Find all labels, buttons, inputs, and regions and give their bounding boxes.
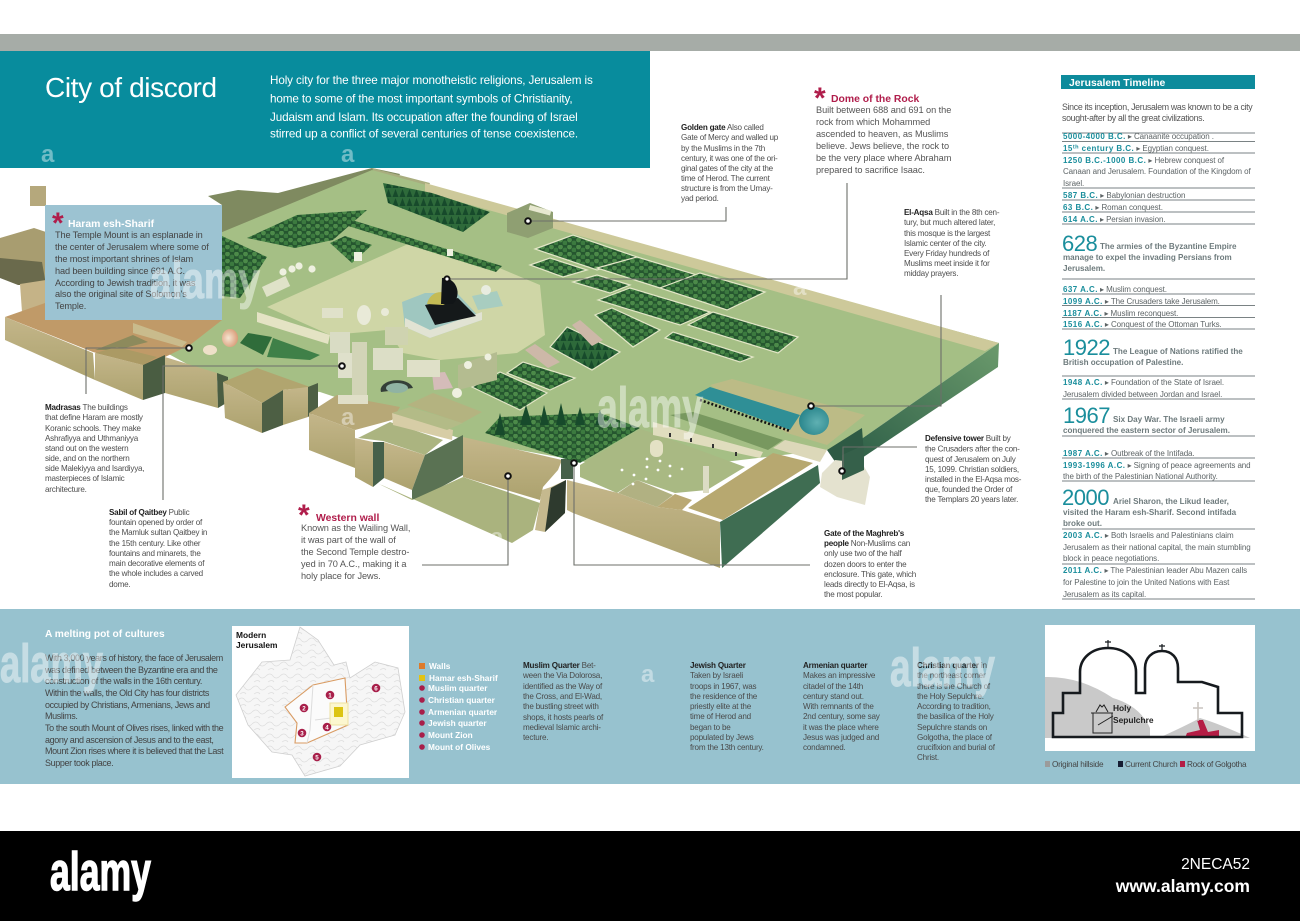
callout: El-Aqsa: Every Friday hundreds of [904, 249, 990, 258]
header panel [0, 51, 650, 168]
callout: Madrasas: side, and on the northern [45, 454, 130, 463]
diagram: Church of the Holy Sepulchre [1045, 625, 1255, 751]
map legend: Hamar esh-Sharif [429, 673, 498, 683]
text: Armenian quarter: century stand out. [803, 692, 864, 701]
map legend: Christian quarter [428, 695, 496, 705]
text: Muslim Quarter: tecture. [523, 733, 548, 742]
top grey band [0, 34, 1300, 51]
map legend: Armenian quarter [428, 707, 498, 717]
diagram: Church of the Holy Sepulchre: Holy [1113, 703, 1131, 713]
map: Modern Jerusalem: 3 [300, 730, 304, 738]
timeline entries: conquests: ▸ Conquest of the Ottoman Turks. [1103, 320, 1222, 329]
text: Muslim Quarter: ween the Via Dolorosa, [522, 671, 602, 680]
watermarks: a [490, 524, 504, 551]
intro text: Judaism and Islam. Its occupation after the founding of Israel [270, 111, 578, 124]
panel: Jerusalem Timeline [1061, 75, 1255, 599]
text: Armenian quarter: it was the place where [803, 723, 879, 732]
timeline entry: 628: Jerusalem. [1063, 264, 1105, 273]
text: Christian quarter: According to tradition, [917, 702, 991, 711]
callout: Dome of the Rock: be the very place where Abraham [816, 153, 952, 163]
callout: Madrasas: architecture. [45, 485, 87, 494]
callout: Sabil of Qaitbey: the 15th century. Like other [109, 539, 201, 548]
callout: Dome of the Rock [814, 82, 954, 175]
western wall plaza [377, 477, 540, 543]
callout: Sabil of Qaitbey: Public [167, 508, 190, 517]
timeline heading [1061, 75, 1255, 89]
callout: Dome of the Rock: believe. Jews believe, the rock to [816, 141, 949, 151]
timeline entry: 1967 [1063, 403, 1230, 435]
back wall row [208, 168, 400, 240]
watermarks: a [941, 395, 955, 422]
text: Jewish Quarter: priestly elite at the [690, 702, 752, 711]
watermarks: alamy [597, 376, 703, 440]
callout: El-Aqsa: Built in the 8th cen- [933, 208, 1000, 217]
text: Christian quarter: Christian quarter [917, 661, 980, 670]
panel: Haram esh-Sharif: the center of Jerusalem where some of [55, 242, 209, 252]
panel: Haram esh-Sharif: also the original site of Solomon's [55, 289, 187, 299]
text: Jewish Quarter: Jewish Quarter [690, 661, 747, 670]
courtyard details [621, 440, 709, 493]
callout: Sabil of Qaitbey: Sabil of Qaitbey [109, 508, 167, 517]
timeline entries: 2003-2011: ▸ Both Israelis and Palestinians claim [1103, 531, 1234, 540]
map legend: Mount of Olives [428, 742, 491, 752]
west surfaces [5, 303, 222, 365]
section text: With 3,000 years of history, the face of Jerusalem [45, 653, 223, 663]
panel: Haram esh-Sharif: The Temple Mount is an esplanade in [55, 230, 203, 240]
timeline entry: 2000 [1062, 485, 1238, 528]
timeline entry: 2000: broke out. [1063, 519, 1102, 528]
panel: Haram esh-Sharif [45, 205, 222, 320]
callout: Dome of the Rock: rock from which Mohammed [816, 117, 930, 127]
map: Modern Jerusalem [232, 626, 409, 778]
timeline entry: 628 [1062, 231, 1239, 273]
callout: Sabil of Qaitbey: the Mamluk sultan Qaitbey in [109, 528, 207, 537]
callout: Golden gate: Gate of Mercy and walled up [681, 133, 779, 142]
text: Armenian quarter: With remnants of the [803, 702, 874, 711]
timeline heading: Jerusalem Timeline [1069, 78, 1165, 89]
timeline entry: 1922: 1922 [1063, 335, 1110, 360]
esplanade [267, 240, 545, 360]
text: Christian quarter: the basilica of the Holy [917, 712, 995, 721]
section text: To the south Mount of Olives rises, linked with the [45, 723, 224, 733]
panel: Haram esh-Sharif: According to Jewish tradition, it was [55, 278, 196, 288]
timeline entries: 1987-1996: ▸ Signing of peace agreements and [1125, 461, 1251, 470]
small domes and buildings [203, 305, 389, 355]
callout: Defensive tower: the Templars 20 years later. [925, 495, 1018, 504]
diagram: Church of the Holy Sepulchre: Sepulchre [1113, 715, 1154, 725]
panel: Haram esh-Sharif: Temple. [55, 301, 86, 311]
timeline entries: antiquity: 1250 B.C.-1000 B.C. [1063, 156, 1146, 165]
timeline entries: 1987-1996: ▸ Outbreak of the Intifada. [1103, 449, 1195, 458]
panel: Haram esh-Sharif: had been building since 691 A.C. [55, 266, 185, 276]
callout: Golden gate: by the Muslims in the 7th [681, 144, 765, 153]
timeline entries: conquests: ▸ Muslim reconquest. [1102, 309, 1178, 318]
timeline entries: antiquity: ▸ Hebrew conquest of [1146, 156, 1225, 165]
section text: Within the walls, the Old City has four districts [45, 688, 210, 698]
terraced gardens [472, 235, 798, 410]
timeline entry: 1948: 1948 A.C. [1063, 378, 1103, 387]
text: Armenian quarter: Armenian quarter [803, 661, 868, 670]
diagram legend: Current Church [1125, 760, 1178, 769]
callout: Defensive tower: quest of Jerusalem on July [925, 455, 1017, 464]
text: Muslim Quarter: Bet- [580, 661, 596, 670]
panel: Haram esh-Sharif: the most important shrines of Islam [55, 254, 194, 264]
callout: Golden gate: Golden gate [681, 123, 726, 132]
timeline entries: 1987-1996: the birth of the Palestinian National Authority. [1063, 472, 1218, 481]
footer image id and site: 2NECA52 [1181, 856, 1250, 873]
callout: Madrasas: that define Haram are mostly [45, 413, 144, 422]
intro text: home to some of the most important symbols of Christianity, [270, 92, 573, 106]
timeline entries: antiquity: 5000-4000 B.C. [1063, 132, 1126, 141]
upper gardens [222, 183, 502, 298]
watermarks: a [341, 404, 355, 431]
timeline entries: 1987-1996: 1993-1996 A.C. [1063, 461, 1125, 470]
callout: Golden gate: Also called [725, 123, 764, 132]
timeline entries: 2003-2011: ▸ The Palestinian leader Abu Mazen calls [1102, 566, 1247, 575]
timeline entries: 1987-1996: 1987 A.C. [1063, 449, 1103, 458]
callout: Sabil of Qaitbey: fountains and minarets, the [109, 549, 201, 558]
text: Jewish Quarter: from the 13th century. [690, 743, 764, 752]
upper rim of the enclosure [425, 183, 999, 351]
callout: Sabil of Qaitbey: dome. [109, 580, 130, 589]
callout: Gate of the Maghreb's people: the most popular. [824, 590, 882, 599]
timeline entries: 2003-2011: 2003 A.C. [1063, 531, 1103, 540]
callout: Dome of the Rock: prepared to sacrifice Isaac. [816, 165, 925, 175]
callout: Sabil of Qaitbey: the whole includes a carved [109, 569, 203, 578]
intro text: stirred up a conflict of several centuries of tense coexistence. [270, 128, 578, 140]
watermarks: alamy [150, 252, 260, 310]
timeline entry: 2000: 2000 [1062, 485, 1109, 510]
callout: El-Aqsa: midday prayers. [904, 269, 958, 278]
callout: Dome of the Rock: * [814, 82, 826, 115]
callout: Western wall: holy place for Jews. [301, 571, 381, 581]
timeline entry: 1922: The League of Nations ratified the [1113, 347, 1243, 356]
callout: Dome of the Rock: Built between 688 and 691 on the [816, 105, 951, 115]
callout: Defensive tower: the Crusaders after the con- [925, 444, 1020, 454]
western wall [463, 437, 562, 500]
text: Armenian quarter: condamned. [803, 743, 846, 752]
callout: Golden gate: time of Herod. The current [681, 174, 771, 183]
timeline entries: antiquity: Canaan and Jerusalem. Foundation of the Kingdom of [1063, 167, 1251, 176]
footer image id and site [1115, 856, 1250, 896]
text: Christian quarter: in [979, 661, 987, 670]
callout: Gate of the Maghreb's people: dozen doors to enter the [824, 560, 907, 569]
timeline entry: 1967: conquered the eastern sector of Jerusalem. [1063, 426, 1230, 435]
south courtyard and block [567, 422, 820, 568]
map: Modern Jerusalem: 4 [325, 724, 329, 732]
timeline rules [1062, 133, 1255, 599]
map: Modern Jerusalem: 5 [315, 754, 319, 762]
timeline entry: 1948: ▸ Foundation of the State of Israel. [1103, 378, 1224, 387]
watermarks: alamy [0, 634, 103, 694]
text: Christian quarter: Sepulchre stands on [917, 723, 987, 732]
timeline entries: 2003-2011: 2011 A.C. [1063, 566, 1102, 575]
timeline entries: antiquity: Israel. [1063, 179, 1084, 188]
timeline entries: 2003-2011: Jerusalem as its capital. [1063, 590, 1146, 599]
text: Jewish Quarter: began to be [690, 723, 731, 732]
section heading: A melting pot of cultures [45, 629, 165, 640]
illustration: Haram esh-Sharif model [0, 168, 999, 568]
Dome of the Rock [402, 278, 503, 338]
map: Modern Jerusalem: Modern [236, 630, 266, 640]
timeline entry: 628: manage to expel the invading Persians from [1063, 253, 1232, 262]
timeline entry: 1967: 1967 [1063, 403, 1110, 428]
watermarks: a [793, 274, 807, 301]
golden gate building [507, 203, 553, 238]
callout: Gate of the Maghreb's people: leads directly to El-Aqsa, is [824, 580, 915, 589]
callout pins [186, 218, 845, 479]
timeline entry: 628: 628 [1062, 231, 1097, 256]
callout: Golden gate: yad period. [681, 194, 719, 203]
footer alamy logo: alamy [50, 842, 151, 902]
section text: occupied by Christians, Armenians, Jews and [45, 700, 210, 710]
watermarks: a [641, 661, 655, 688]
timeline entries: antiquity: th [1073, 144, 1079, 150]
callout: El-Aqsa: Islamic center of the city. [904, 239, 987, 248]
callout: Golden gate: structure is from the Umay- [681, 184, 773, 193]
section text: Muslims. [45, 711, 77, 721]
timeline entry: 2000: visited the Haram esh-Sharif. Second intifada [1063, 508, 1237, 517]
text: Armenian quarter: 2nd century, some say [803, 712, 881, 721]
timeline entry: 1967: Six Day War. The Israeli army [1113, 415, 1225, 424]
callout: Gate of the Maghreb's people: Non-Muslims can [849, 539, 910, 548]
text: Muslim Quarter: identified as the Way of [523, 682, 603, 691]
map legend: Mount Zion [428, 730, 473, 740]
timeline entry: 2000: Ariel Sharon, the Likud leader, [1113, 497, 1229, 506]
watermarks [0, 141, 995, 698]
map legend: Walls [429, 661, 451, 671]
footer bar [0, 831, 1300, 921]
map: Modern Jerusalem: Jerusalem [236, 640, 277, 650]
callout: Defensive tower: que, founded the Order of [925, 485, 1013, 494]
text: Muslim Quarter: Muslim Quarter [523, 661, 581, 670]
callout: Western wall: Known as the Wailing Wall, [301, 523, 410, 533]
callout: Dome of the Rock: Dome of the Rock [831, 94, 920, 105]
timeline entries: antiquity: ▸ Roman conquest. [1093, 203, 1163, 212]
timeline entries: antiquity: 587 B.C. [1063, 191, 1098, 200]
callout: Gate of the Maghreb's people: enclosure. This gate, which [824, 570, 916, 579]
diagram legend [1045, 760, 1247, 769]
timeline entries: antiquity: ▸ Canaanite occupation . [1126, 132, 1214, 141]
timeline entries: antiquity: century B.C. [1079, 144, 1134, 153]
map legend [419, 661, 498, 752]
east wall face [856, 343, 999, 462]
west wall sections [5, 317, 318, 433]
diagram legend: Rock of Golgotha [1187, 760, 1247, 769]
timeline entry: 628: The armies of the Byzantine Empire [1100, 242, 1237, 251]
watermarks: a [41, 141, 55, 168]
callout: Gate of the Maghreb's people: only use two of the half [824, 549, 902, 558]
callout: Western wall [298, 499, 413, 581]
text: Christian quarter: the Holy Sepulchre. [917, 692, 984, 701]
map legend: Jewish quarter [428, 718, 487, 728]
forest [485, 403, 640, 463]
timeline entries: 2003-2011: Jerusalem as their national capital, the main stumbling [1063, 543, 1251, 552]
timeline entries: antiquity: ▸ Persian invasion. [1098, 215, 1165, 224]
callout: Defensive tower: 15, 1099. Christian soldiers, [925, 465, 1019, 474]
callout: Western wall: the Second Temple destro- [301, 547, 409, 557]
main plateau [130, 170, 999, 472]
callout: Golden gate: century, it was one of the ori- [681, 154, 778, 163]
timeline entries: antiquity: ▸ Egyptian conquest. [1134, 144, 1209, 153]
text: Christian quarter: Christ. [917, 753, 939, 762]
text: Muslim Quarter: shops, it hosts pearls of [523, 713, 604, 722]
text: Christian quarter: the northeast corner [917, 671, 986, 680]
callout: El-Aqsa: Muslims meet inside it for [904, 259, 990, 268]
callout: El-Aqsa: this mosque is the largest [904, 229, 991, 238]
timeline entries: conquests: 1099 A.C. [1063, 297, 1103, 306]
callout: Madrasas: The buildings [81, 403, 128, 412]
text: Muslim Quarter: the Cross, and El-Wad, [523, 692, 602, 701]
callout: Madrasas: Ashrafiyya and Uthmaniyya [45, 434, 139, 443]
text: Armenian quarter: Makes an impressive [803, 671, 876, 680]
section text: Supper took place. [45, 758, 113, 768]
timeline entry: 1922 [1063, 335, 1245, 367]
timeline entries: antiquity: ▸ Babylonian destruction [1098, 191, 1185, 200]
terrace buildings with white domes [262, 249, 453, 297]
callout: Sabil of Qaitbey: fountain opened by order of [109, 518, 203, 527]
far left buildings [0, 186, 46, 320]
callout: Madrasas: stand out on the western [45, 444, 128, 453]
text: Jewish Quarter: time of Herod and [690, 712, 751, 721]
text: Armenian quarter: Jesus was judged and [803, 733, 879, 742]
timeline entry: 1922: British occupation of Palestine. [1063, 358, 1183, 367]
west garden patches [240, 333, 272, 355]
callout: Madrasas: Madrasas [45, 403, 81, 412]
intro text: Holy city for the three major monotheistic religions, Jerusalem is [270, 74, 593, 87]
timeline entries: antiquity: 614 A.C. [1063, 215, 1098, 224]
timeline entries: antiquity: 63 B.C. [1063, 203, 1093, 212]
map: Modern Jerusalem: 6 [374, 686, 378, 692]
text: Muslim Quarter: the bustling street with [523, 702, 599, 711]
timeline entries: conquests: 1516 A.C. [1063, 320, 1103, 329]
callout: Sabil of Qaitbey: main decorative elements of [109, 559, 205, 568]
callout: Western wall: it was part of the wall of [301, 535, 396, 545]
callout: Western wall: yed in 70 A.C., making it a [301, 559, 407, 569]
callout: Madrasas: Koranic schools. They make [45, 424, 142, 433]
text: Jewish Quarter: the residence of the [690, 692, 758, 701]
callout lines [86, 183, 941, 565]
timeline intro: sought-after by all the great civilizations. [1062, 113, 1204, 123]
callout: Defensive tower: Defensive tower [925, 434, 985, 443]
cream enclosure wall [257, 312, 330, 344]
callout: Madrasas: side Malekiyya and Isardiyya, [45, 464, 144, 473]
callout: Western wall: Western wall [316, 513, 379, 524]
timeline entry: 1948: Jerusalem divided between Jordan and Israel. [1063, 390, 1222, 399]
callout: El-Aqsa: El-Aqsa [904, 208, 933, 217]
text: Armenian quarter: citadel of the 14th [803, 682, 863, 691]
footer image id and site: www.alamy.com [1115, 876, 1250, 896]
timeline intro: Since its inception, Jerusalem was known to be a city [1062, 102, 1253, 112]
text: Christian quarter: there is the Church of [917, 682, 991, 691]
callout: Gate of the Maghreb's people: Gate of the Maghreb's [824, 529, 905, 538]
watermarks: a [341, 141, 355, 168]
timeline entries: conquests: 1187 A.C. [1063, 309, 1102, 318]
callout: Defensive tower: Built by [984, 434, 1012, 443]
timeline entries: conquests: ▸ Muslim conquest. [1098, 285, 1167, 294]
text: Christian quarter: Golgotha, the place of [917, 733, 993, 742]
El-Aqsa mosque [670, 379, 865, 466]
section text: was defined between the Byzantine era and the [44, 665, 218, 675]
callout: Madrasas: masterpieces of Islamic [45, 474, 125, 483]
timeline entries: antiquity: 15 [1063, 144, 1134, 153]
panel: Haram esh-Sharif: Haram esh-Sharif [68, 219, 155, 230]
stair block [535, 459, 573, 532]
map: Modern Jerusalem: 2 [302, 706, 306, 712]
panel: Haram esh-Sharif: * [52, 207, 64, 240]
minaret and Sabil buildings [330, 327, 497, 404]
callout: El-Aqsa: tury, but much altered later, [904, 218, 995, 227]
map legend: Muslim quarter [428, 683, 488, 693]
stairways [432, 320, 603, 390]
text: Jewish Quarter: troops in 1967, was [690, 682, 757, 691]
callout: Dome of the Rock: ascended to heaven, as Muslims [816, 129, 949, 139]
diagram legend: Original hillside [1052, 760, 1104, 769]
callout: Golden gate: ginal gates of the city at the [681, 164, 774, 173]
text: Jewish Quarter: populated by Jews [690, 733, 754, 742]
section text: agony and ascension of Jesus and to the east, [45, 735, 214, 745]
section text: Mount Zion rises where it is believed that the Last [45, 746, 224, 756]
timeline entries: 2003-2011: for Palestine to join the United Nations with East [1063, 578, 1230, 587]
callout: Gate of the Maghreb's people: people [824, 539, 849, 548]
callout: Western wall: * [298, 499, 310, 532]
timeline entries: conquests: 637 A.C. [1063, 285, 1098, 294]
map: Modern Jerusalem: 1 [328, 692, 332, 700]
text: Muslim Quarter: medieval Islamic archi- [523, 723, 601, 732]
south-west blocks and gate [309, 393, 482, 500]
timeline entries: conquests: ▸ The Crusaders take Jerusalem. [1103, 297, 1220, 306]
watermarks: alamy [890, 638, 995, 698]
defensive tower [820, 445, 870, 505]
text: Jewish Quarter: Taken by Israeli [690, 671, 743, 680]
section text: construction of the walls in the 16th century. [45, 676, 202, 686]
callout: Defensive tower: installed in the El-Aqsa mos- [925, 475, 1022, 484]
timeline entries: 2003-2011: block in peace negotiations. [1063, 554, 1159, 563]
title: City of discord [45, 72, 217, 103]
panel: A melting pot of cultures [0, 609, 1300, 784]
text: Christian quarter: crucifixion and burial of [917, 743, 996, 752]
